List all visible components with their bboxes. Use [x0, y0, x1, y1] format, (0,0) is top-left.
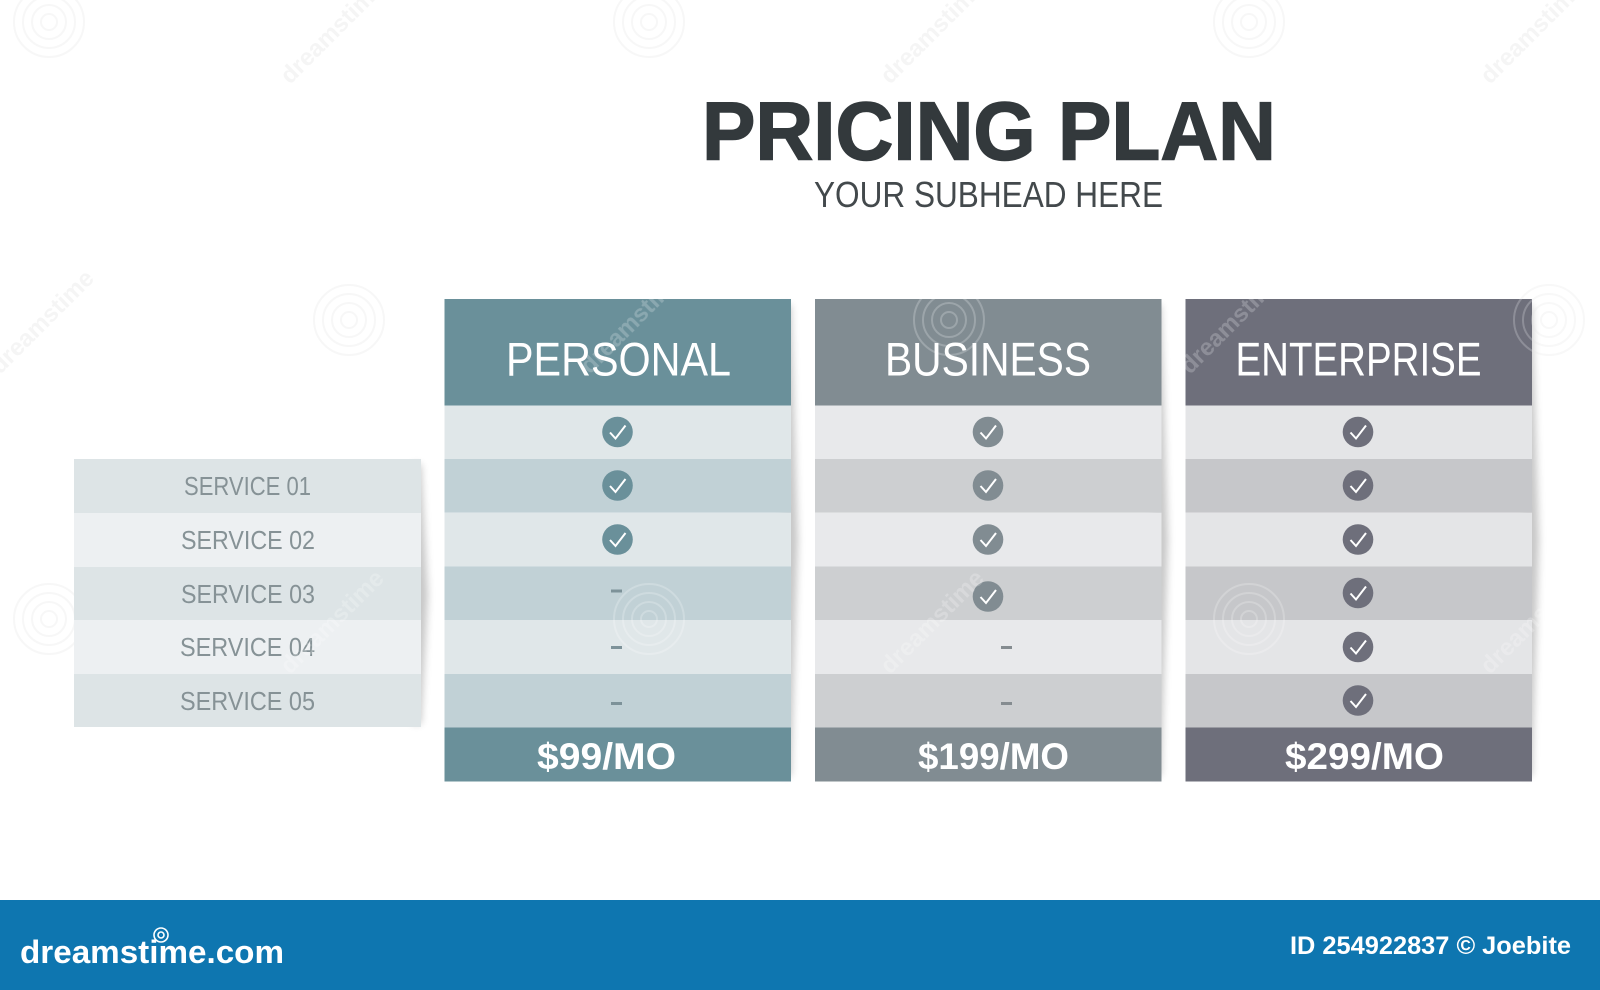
service labels: SERVICE 04	[180, 632, 315, 662]
price: business: $199/MO	[918, 736, 1069, 777]
footer logo spiral	[154, 928, 168, 942]
pricing plan infographic: dreamstime	[875, 565, 990, 679]
pricing plan infographic: dreamstime	[275, 565, 390, 679]
plan name: business: BUSINESS	[885, 332, 1091, 386]
footer image id and credit: ID 254922837 © Joebite	[1290, 932, 1571, 960]
price: enterprise: $299/MO	[1285, 736, 1444, 777]
panel: enterprise plan	[1186, 299, 1539, 782]
plan name: enterprise: ENTERPRISE	[1236, 332, 1482, 386]
service labels	[180, 471, 315, 716]
title: PRICING PLAN	[702, 84, 1276, 178]
pricing plan infographic: dreamstime	[1175, 265, 1290, 379]
service labels: SERVICE 03	[181, 579, 315, 609]
price: personal: $99/MO	[537, 736, 676, 777]
dashes: business	[1001, 646, 1012, 705]
checks: personal	[602, 417, 633, 555]
service labels: SERVICE 02	[181, 525, 315, 555]
pricing plan infographic: dreamstime	[575, 265, 690, 379]
panel: personal plan	[444, 299, 798, 782]
pricing plan infographic: dreamstime	[1475, 565, 1590, 679]
footer bar	[0, 900, 1600, 990]
panel: business plan	[815, 299, 1168, 782]
service labels: SERVICE 05	[180, 686, 315, 716]
panel: service list	[74, 459, 428, 727]
subhead: YOUR SUBHEAD HERE	[814, 174, 1163, 215]
checks: enterprise	[1343, 417, 1373, 716]
dashes: personal	[611, 590, 622, 705]
plan name: personal: PERSONAL	[506, 332, 731, 386]
checks: business	[973, 417, 1003, 612]
footer logo text: dreamstime.com	[20, 934, 284, 970]
service labels: SERVICE 01	[184, 471, 311, 501]
